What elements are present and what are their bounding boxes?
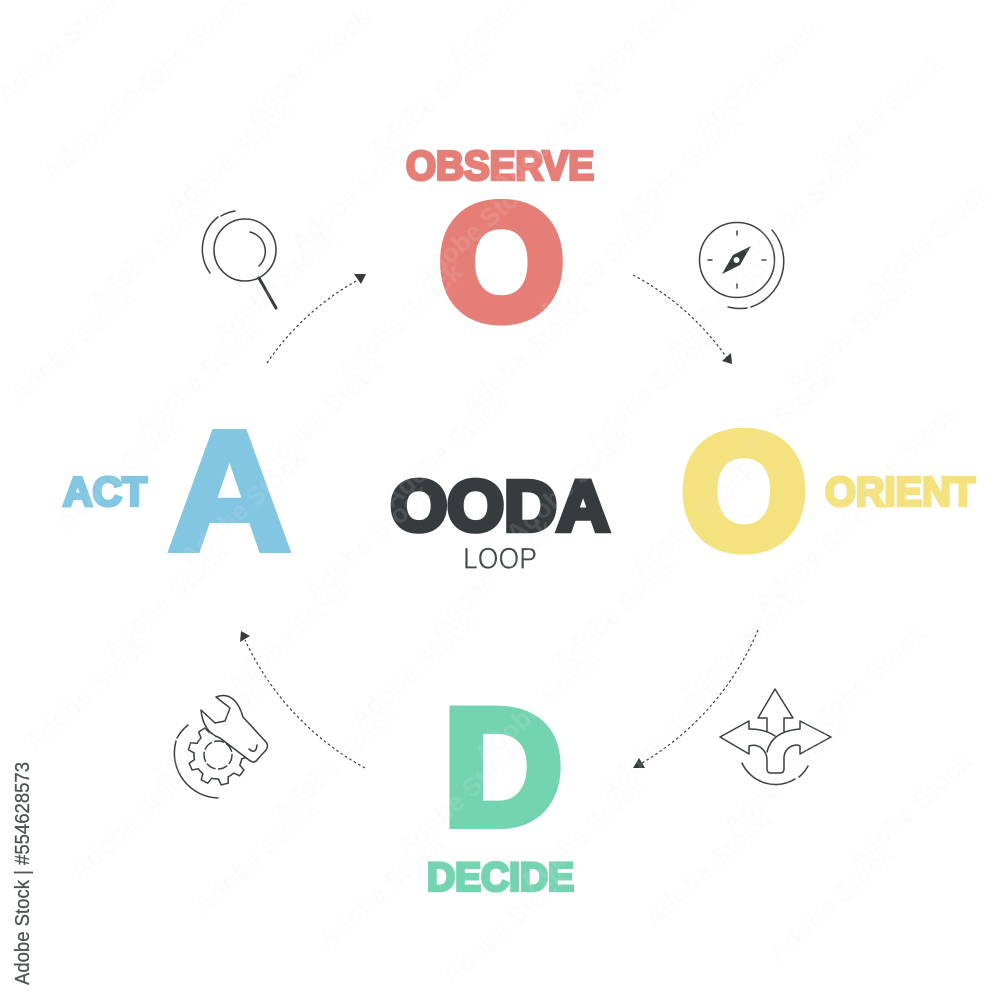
faint repeating watermark: Adobe Stock (188, 792, 326, 921)
faint repeating watermark: Adobe Stock (266, 699, 404, 828)
faint repeating watermark: Adobe Stock (762, 839, 900, 968)
faint repeating watermark: Adobe Stock (578, 327, 716, 456)
swoosh around gear (177, 725, 188, 738)
label: ACT: ACT (63, 468, 147, 514)
faint repeating watermark: Adobe Stock (624, 455, 762, 584)
vertical watermark credit: Adobe Stock | #554628573 (12, 762, 34, 985)
faint repeating watermark: Adobe Stock (96, 536, 234, 665)
faint repeating watermark: Adobe Stock (174, 443, 312, 572)
faint repeating watermark: Adobe Stock (468, 641, 606, 770)
faint repeating watermark: Adobe Stock (284, 129, 422, 258)
faint repeating watermark: Adobe Stock (532, 199, 670, 328)
faint repeating watermark: Adobe Stock (858, 176, 996, 305)
faint repeating watermark: Adobe Stock (436, 862, 574, 991)
faint repeating watermark: Adobe Stock (312, 827, 450, 956)
faint repeating watermark: Adobe Stock (546, 548, 684, 677)
arrow: observe to orient (633, 275, 732, 364)
faint repeating watermark: Adobe Stock (390, 734, 528, 863)
faint repeating watermark: Adobe Stock (840, 746, 978, 875)
arrow: decide to act (240, 631, 365, 768)
faint repeating watermark: Adobe Stock (142, 664, 280, 793)
label: OBSERVE: OBSERVE (406, 142, 594, 188)
step: observe (406, 142, 594, 353)
faint repeating watermark: Adobe Stock (4, 280, 142, 409)
faint repeating watermark: Adobe Stock (670, 583, 808, 712)
gear (187, 724, 248, 786)
arrow: act to observe (267, 274, 366, 363)
label: ORIENT: ORIENT (825, 468, 975, 514)
faint repeating watermark: Adobe Stock (610, 106, 748, 235)
icon: wrench and gear (174, 696, 268, 798)
big letter A blue: A (168, 396, 291, 586)
faint repeating watermark: Adobe Stock (454, 292, 592, 421)
faint repeating watermark: Adobe Stock (220, 571, 358, 700)
faint repeating watermark: Adobe Stock (36, 59, 174, 188)
big letter O red: O (439, 172, 564, 353)
arrow: orient to decide (633, 630, 758, 768)
step: act (63, 396, 291, 586)
faint repeating watermark: Adobe Stock (734, 141, 872, 270)
big letter D green: D (443, 675, 563, 859)
faint repeating watermark: Adobe Stock (160, 94, 298, 223)
center title: OODA LOOP (390, 468, 610, 576)
faint repeating watermark: Adobe Stock (826, 397, 964, 526)
faint repeating watermark: Adobe Stock (514, 769, 652, 898)
faint repeating watermark: Adobe Stock (702, 362, 840, 491)
faint repeating watermark: Adobe Stock (238, 1, 376, 130)
wrench (201, 696, 268, 762)
faint repeating watermark: Adobe Stock (638, 804, 776, 933)
faint repeating watermark: Adobe Stock (362, 36, 500, 165)
faint repeating watermark: Adobe Stock (298, 478, 436, 607)
icon: three-way direction arrows (720, 689, 831, 784)
faint repeating watermark: Adobe Stock (656, 234, 794, 363)
faint repeating watermark: Adobe Stock (376, 385, 514, 514)
icon: compass (700, 222, 784, 309)
faint repeating watermark: Adobe Stock (500, 420, 638, 549)
label: DECIDE: DECIDE (427, 856, 574, 900)
big letter O yellow: O (682, 401, 806, 582)
step: decide (427, 675, 574, 900)
faint repeating watermark: Adobe Stock (82, 187, 220, 316)
faint repeating watermark: Adobe Stock (812, 48, 950, 177)
faint repeating watermark: Adobe Stock (422, 513, 560, 642)
faint repeating watermark: Adobe Stock (716, 711, 854, 840)
faint repeating watermark: Adobe Stock (794, 618, 932, 747)
faint repeating watermark: Adobe Stock (486, 71, 624, 200)
step: orient (682, 401, 975, 582)
heading: OODA: OODA (390, 468, 610, 546)
faint repeating watermark: Adobe Stock (18, 629, 156, 758)
faint repeating watermark: Adobe Stock (748, 490, 886, 619)
faint repeating watermark: Adobe Stock (330, 257, 468, 386)
faint repeating watermark: Adobe Stock (252, 350, 390, 479)
faint repeating watermark: Adobe Stock (688, 13, 826, 142)
icon: magnifying glass (202, 211, 276, 308)
faint repeating watermark: Adobe Stock (592, 676, 730, 805)
faint repeating watermark: Adobe Stock (50, 408, 188, 537)
faint repeating watermark: Adobe Stock (128, 315, 266, 444)
faint repeating watermark: Adobe Stock (206, 222, 344, 351)
faint repeating watermark: Adobe Stock (64, 757, 202, 886)
subheading: LOOP: LOOP (463, 542, 537, 576)
faint repeating watermark: Adobe Stock (408, 164, 546, 293)
faint repeating watermark: Adobe Stock (344, 606, 482, 735)
faint repeating watermark: Adobe Stock (780, 269, 918, 398)
